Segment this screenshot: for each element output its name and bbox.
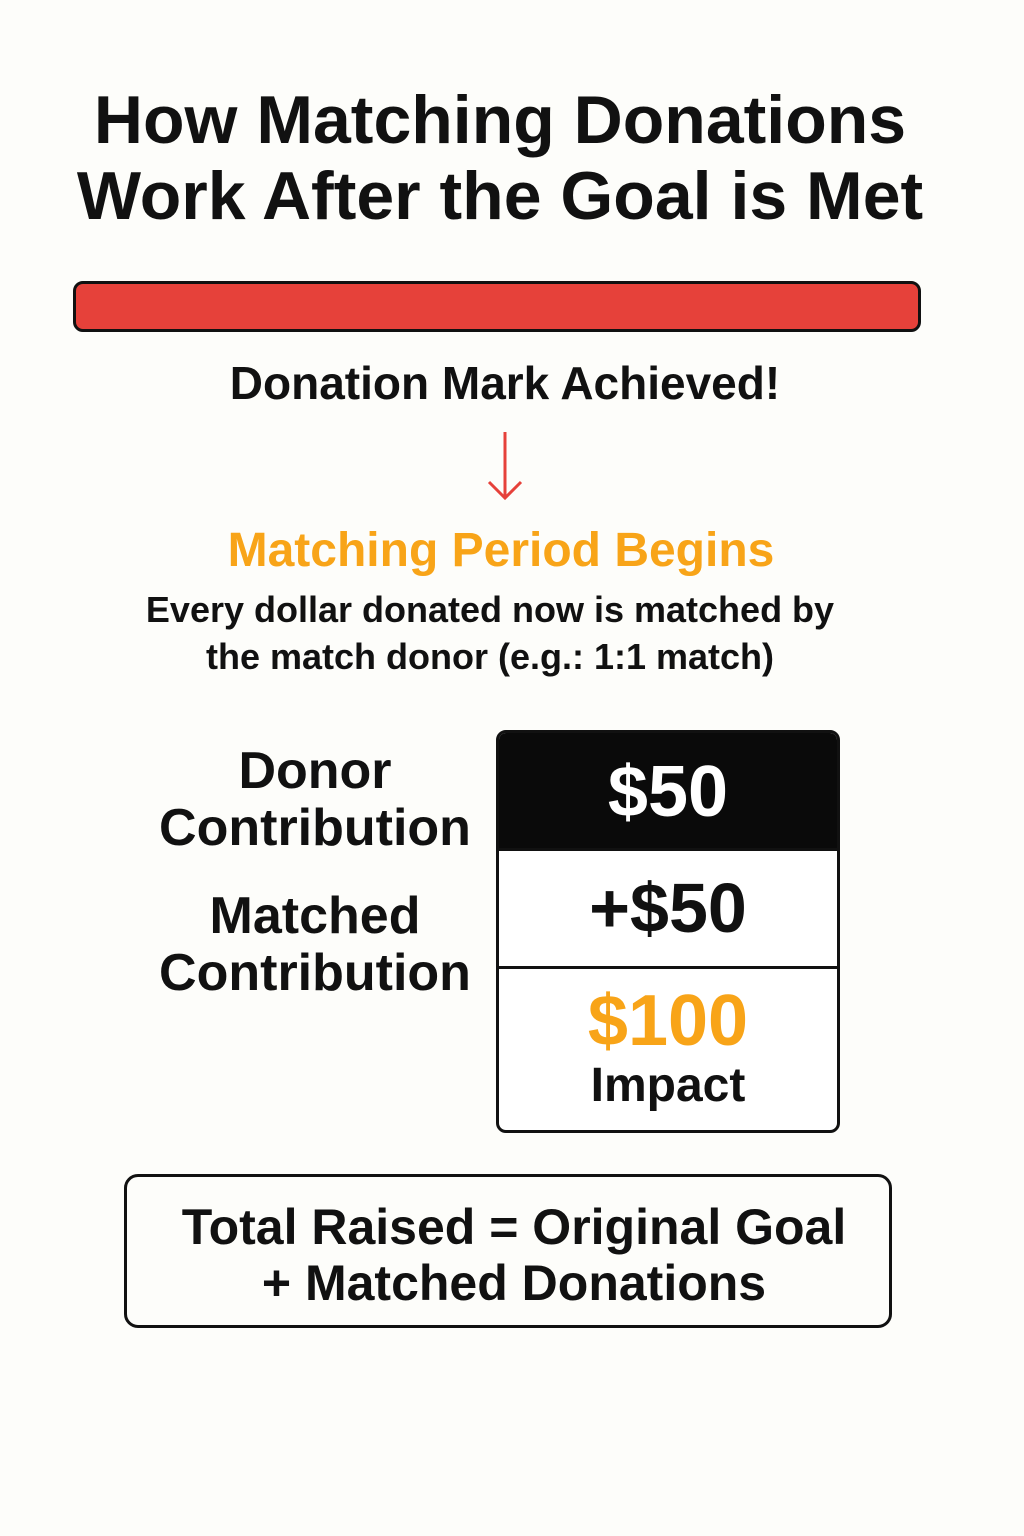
cell: +$50: +$50	[589, 869, 747, 947]
cell: $50	[499, 733, 837, 848]
cell: $50: $50	[608, 752, 728, 832]
label: donor contribution	[159, 742, 471, 857]
arrow	[488, 432, 522, 500]
cell: $100 impact: Impact	[591, 1059, 745, 1112]
cell: +$50	[499, 848, 837, 969]
calculation table	[496, 730, 840, 1133]
total box: Total Raised = Original Goal	[182, 1199, 846, 1255]
title	[77, 82, 923, 234]
progress bar	[73, 281, 921, 332]
heading: donation mark achieved: Donation Mark Achieved!	[230, 357, 780, 409]
title: Work After the Goal is Met	[77, 158, 923, 234]
description: the match donor (e.g.: 1:1 match)	[206, 636, 774, 677]
title: How Matching Donations	[94, 82, 906, 158]
cell: $100 impact	[588, 981, 748, 1112]
total box	[124, 1174, 892, 1328]
label: matched contribution: Contribution	[159, 944, 471, 1002]
label: matched contribution	[159, 887, 471, 1002]
label: donor contribution: Contribution	[159, 799, 471, 857]
description	[146, 589, 834, 677]
heading: matching period: Matching Period Begins	[228, 524, 774, 577]
label: donor contribution: Donor	[238, 742, 392, 800]
description: Every dollar donated now is matched by	[146, 589, 834, 630]
total box: + Matched Donations	[262, 1255, 766, 1311]
cell: $100 impact: $100	[588, 981, 748, 1061]
label: matched contribution: Matched	[210, 887, 420, 945]
